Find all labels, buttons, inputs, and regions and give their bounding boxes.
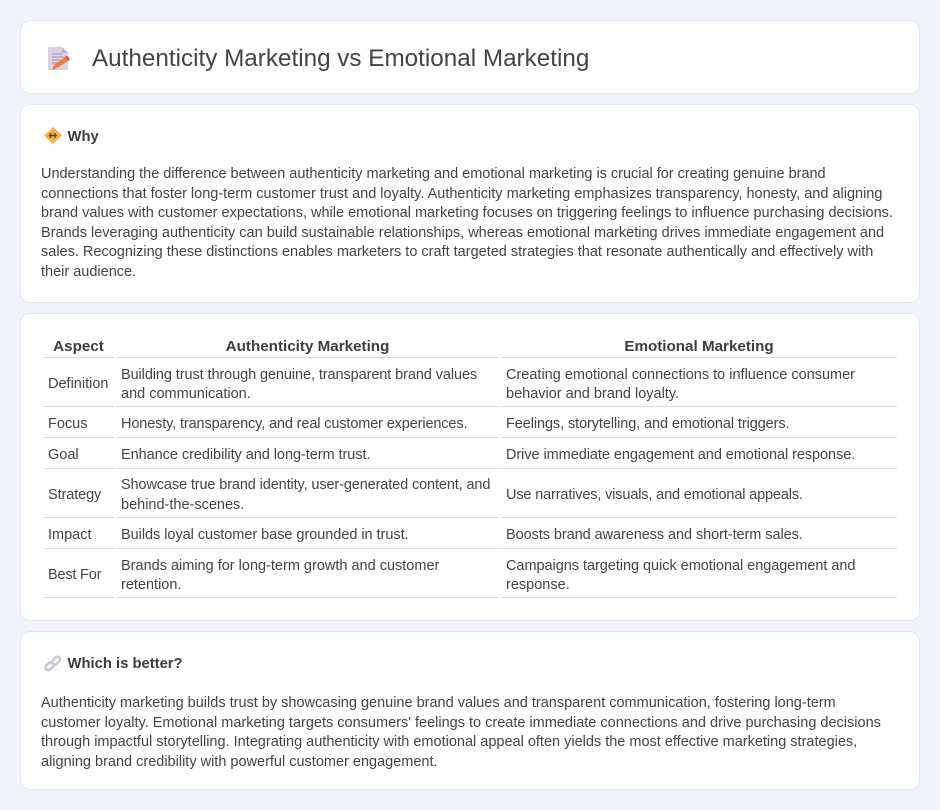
text block: why: Brands leveraging authenticity can build sustainable relationships, whereas emotional marketing drives immediate engagement and <box>41 225 884 241</box>
text block: which is better: customer loyalty. Emotional marketing targets consumers' feelings to create immediate connections and drive purchasing decisions <box>41 715 881 731</box>
row: best for: response. <box>506 577 570 593</box>
table header row: Emotional Marketing <box>624 338 774 355</box>
row: focus <box>48 416 790 432</box>
row: goal: Drive immediate engagement and emotional response. <box>506 447 855 463</box>
row: impact <box>48 527 803 543</box>
text block: which is better: Authenticity marketing builds trust by showcasing genuine brand values and transparent communication, fostering long-term <box>41 695 836 711</box>
icon: warning diamond <box>44 127 62 144</box>
text block: which is better: aligning brand credibility with powerful customer engagement. <box>41 754 438 770</box>
row: strategy <box>48 477 803 513</box>
table header row: Authenticity Marketing <box>226 338 389 355</box>
panel: why <box>20 104 920 303</box>
text block: why: sales. Recognizing these distinctions enables marketers to craft targeted strategies that resonate authentically and effectively with <box>41 244 873 260</box>
panel: which is better <box>20 631 920 790</box>
text block: which is better: through impactful storytelling. Integrating authenticity with emotional appeal often yields the most effective marketing strategies, <box>41 734 857 750</box>
text block: why: brand values with customer expectations, while emotional marketing focuses on triggering feelings to influence purchasing decisions. <box>41 205 893 221</box>
row: goal <box>48 447 855 463</box>
row: goal: Goal <box>48 447 79 463</box>
row: focus: Honesty, transparency, and real customer experiences. <box>121 416 467 432</box>
text block: why: Understanding the difference between authenticity marketing and emotional marketing is crucial for creating genuine brand <box>41 166 826 182</box>
row: impact: Builds loyal customer base grounded in trust. <box>121 527 409 543</box>
table header row <box>53 338 774 355</box>
row: impact: Boosts brand awareness and short-term sales. <box>506 527 803 543</box>
row: definition: behavior and brand loyalty. <box>506 386 679 402</box>
row: definition: and communication. <box>121 386 251 402</box>
row: focus: Feelings, storytelling, and emotional triggers. <box>506 416 790 432</box>
row: strategy: Showcase true brand identity, user-generated content, and <box>121 477 490 493</box>
panel: header <box>20 20 920 94</box>
row: best for: retention. <box>121 577 181 593</box>
text block: why: their audience. <box>41 264 136 280</box>
row: strategy: Use narratives, visuals, and emotional appeals. <box>506 487 803 503</box>
row: definition: Building trust through genuine, transparent brand values <box>121 367 477 383</box>
row: best for <box>48 558 855 593</box>
row: definition: Creating emotional connections to influence consumer <box>506 367 855 383</box>
text block: which is better <box>41 695 881 770</box>
row: strategy: Strategy <box>48 487 101 503</box>
row: definition: Definition <box>48 376 108 392</box>
heading: which is better: Which is better? <box>68 656 183 672</box>
row: goal: Enhance credibility and long-term trust. <box>121 447 370 463</box>
panel: comparison table <box>20 313 920 621</box>
icon: document with pencil <box>48 47 70 70</box>
text block: why <box>41 166 893 280</box>
row: focus: Focus <box>48 416 88 432</box>
text block: why: connections that foster long-term customer trust and loyalty. Authenticity marketing emphasizes transparency, honesty, and aligning <box>41 186 882 202</box>
row: best for: Brands aiming for long-term growth and customer <box>121 558 439 574</box>
row: best for: Best For <box>48 567 101 583</box>
row: definition <box>48 367 855 402</box>
row: impact: Impact <box>48 527 92 543</box>
row: strategy: behind-the-scenes. <box>121 497 244 513</box>
heading: why: Why <box>68 129 99 145</box>
table header row: Aspect <box>53 338 104 355</box>
row: best for: Campaigns targeting quick emotional engagement and <box>506 558 855 574</box>
title: Authenticity Marketing vs Emotional Marketing <box>92 45 589 72</box>
icon: chain link <box>44 656 62 672</box>
